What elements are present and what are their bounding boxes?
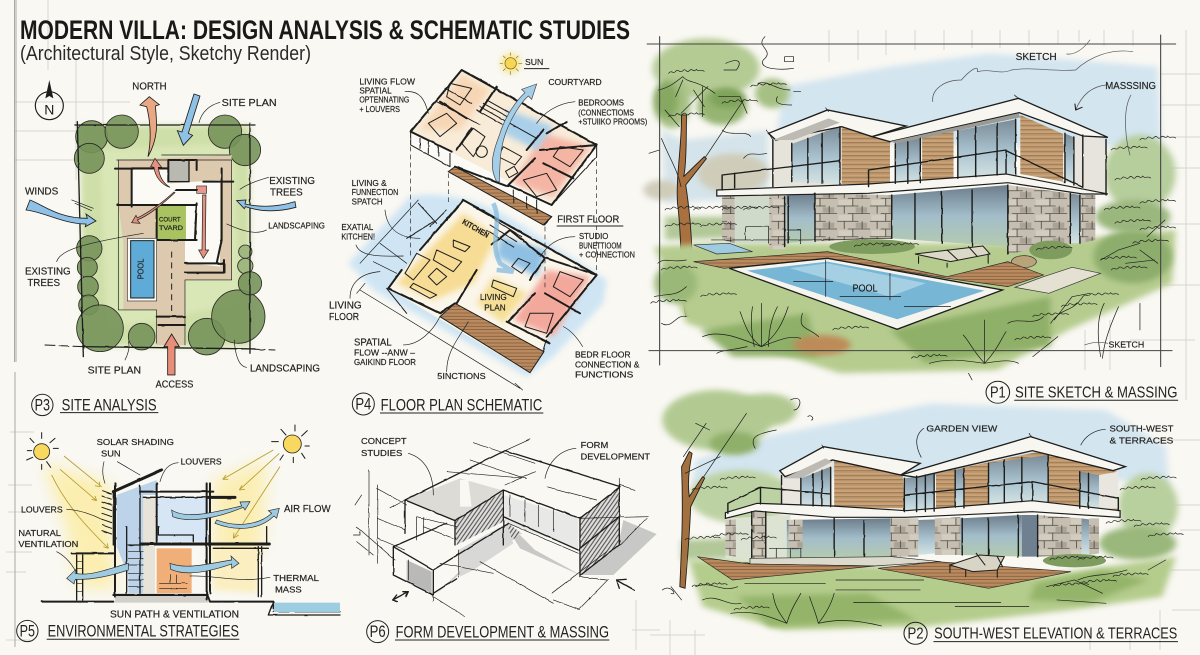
labels — [329, 77, 648, 381]
labels: LOUVERS — [181, 458, 222, 467]
labels: FLOW --ANW – — [354, 349, 416, 358]
labels: SUN PATH & VENTILATION — [110, 609, 239, 620]
heading: P4 — [352, 393, 543, 415]
tree — [649, 37, 801, 317]
labels: (CONNECTIOMS — [578, 108, 634, 117]
lower floor plan: PLAN — [484, 304, 506, 313]
labels: NORTH — [132, 81, 167, 92]
labels: STUDIO — [579, 232, 608, 241]
labels: +STUIIKO PROOMS) — [578, 118, 648, 127]
sky wash — [692, 403, 1169, 487]
arrow: west winds — [26, 200, 96, 227]
heading: P1: P1 — [990, 385, 1006, 401]
heading: P3: P3 — [35, 395, 50, 414]
drawing frame — [647, 35, 1176, 367]
tree — [662, 390, 813, 600]
water wash — [348, 195, 607, 377]
labels: EXISTING — [25, 266, 71, 277]
planting — [651, 69, 1176, 380]
labels: TREES — [27, 278, 60, 289]
labels: FUNNECTION — [352, 188, 399, 197]
cloud and leader lines — [933, 40, 1133, 345]
labels: TREES — [270, 188, 303, 199]
labels: BEDROOMS — [578, 99, 624, 108]
planting and grass strokes — [685, 476, 1183, 626]
labels: SITE PLAN — [88, 365, 141, 376]
villa upper volumes — [780, 437, 1125, 513]
arrow: east winds — [237, 200, 296, 211]
rooms — [115, 480, 208, 603]
heading: P6 — [367, 621, 609, 643]
labels: BUNETTIOOM — [579, 241, 622, 250]
wood deck and side pool — [694, 243, 1101, 293]
labels: FLOOR — [329, 312, 359, 323]
labels: SKETCH — [1016, 52, 1057, 63]
labels — [25, 81, 325, 390]
labels: SPATIAL — [359, 87, 392, 96]
lawn — [654, 230, 1176, 373]
sun: SUN — [525, 57, 543, 67]
heading: P4: FLOOR PLAN SCHEMATIC — [381, 396, 542, 415]
heading: P2 — [904, 622, 1178, 644]
lawn — [689, 557, 1176, 630]
labels: SPATCH — [352, 197, 383, 206]
panel: P4 floor plan schematic — [329, 53, 648, 415]
labels: LANDSCAPING — [268, 221, 325, 230]
lower floor plan: KITCHEN — [461, 217, 491, 240]
subtitle: (Architectural Style, Sketchy Render) — [20, 43, 311, 65]
labels — [926, 425, 1174, 445]
labels: KITCHEN! — [341, 232, 375, 241]
labels: SPATIAL — [354, 338, 392, 349]
labels: STUDIES — [361, 449, 402, 458]
labels — [361, 437, 650, 461]
villa upper volumes — [769, 98, 1108, 194]
labels: LANDSCAPING — [250, 364, 320, 375]
panel: P1 site sketch and massing — [644, 35, 1178, 403]
labels: VENTILATION — [18, 540, 79, 549]
heading: P4: P4 — [355, 395, 371, 414]
heading: P6: P6 — [370, 622, 386, 641]
building footprint and courtyard: TVARD — [159, 225, 183, 232]
panel: P5 environmental strategies — [17, 425, 340, 642]
labels: + LOUVERS — [359, 105, 400, 114]
labels: FUNCTIONS — [575, 370, 633, 379]
labels: FIRST FLOOR — [557, 215, 619, 226]
deck and loungers — [697, 553, 1106, 588]
labels: GAIKIND FLOOR — [354, 358, 416, 367]
labels: SITE PLAN — [222, 98, 277, 109]
labels: MASSSING — [1105, 81, 1156, 92]
heading: P1 — [986, 381, 1178, 403]
labels: SKETCH — [1109, 341, 1144, 350]
labels: + COHNECTION — [579, 251, 635, 260]
labels: SOUTH-WEST — [1110, 425, 1173, 434]
suns — [27, 425, 309, 469]
villa line work — [711, 95, 1106, 254]
labels: CONNECTION & — [575, 361, 640, 370]
villa line work — [720, 433, 1118, 565]
heading: P5: P5 — [20, 621, 35, 640]
background foliage — [644, 135, 1176, 240]
labels: LIVING & — [352, 179, 387, 188]
labels: COURTYARD — [548, 78, 602, 87]
labels: SOLAR SHADING — [97, 438, 174, 447]
labels: FORM — [581, 441, 608, 450]
compass — [35, 80, 63, 120]
leader lines — [917, 428, 1105, 457]
sun — [500, 53, 549, 75]
massing faces — [407, 487, 620, 593]
heading: P3: SITE ANALYSIS — [62, 396, 157, 415]
background foliage — [682, 470, 1178, 560]
air flow arrows — [67, 502, 279, 584]
ground shadow — [405, 478, 657, 595]
labels: LOUVERS — [21, 506, 63, 515]
villa ground floor — [725, 501, 1120, 565]
heading: P6: FORM DEVELOPMENT & MASSING — [396, 622, 609, 641]
labels: CONCEPT — [361, 437, 407, 446]
heading: P5 — [17, 620, 239, 642]
labels: THERMAL — [273, 574, 320, 583]
leader lines — [57, 462, 270, 580]
section lines — [42, 470, 340, 615]
labels: SUN — [101, 450, 121, 459]
arrow: north — [140, 97, 159, 157]
panel: P6 form development — [353, 437, 657, 643]
heading: P5: ENVIRONMENTAL STRATEGIES — [48, 622, 239, 641]
panel: P2 south-west elevation and terraces — [662, 390, 1183, 644]
site plan lawn — [80, 125, 250, 347]
trees — [74, 115, 265, 355]
labels: LIVING FLOW — [359, 77, 415, 86]
labels: NATURAL — [18, 529, 62, 538]
labels: AIR FLOW — [284, 504, 332, 515]
leader lines — [408, 448, 576, 495]
heading: P2: P2 — [907, 626, 924, 643]
labels: DEVELOPMENT — [581, 452, 650, 461]
labels: ACCESS — [156, 379, 193, 390]
villa ground floor — [717, 174, 1108, 254]
projection lines — [411, 147, 597, 290]
sketch lines — [353, 439, 648, 617]
arrow: interior flows — [132, 158, 209, 258]
solar rays — [52, 450, 280, 548]
flow arrow — [492, 84, 537, 182]
arrow: blue wind from north — [177, 94, 200, 145]
pool: POOL — [136, 258, 146, 279]
pool — [729, 258, 1002, 329]
labels: EXATIAL — [341, 223, 374, 232]
leader lines — [350, 91, 583, 372]
upper floor plan — [411, 70, 597, 225]
site boundary — [45, 122, 275, 357]
pool — [127, 238, 157, 301]
title: MODERN VILLA: DESIGN ANALYSIS & SCHEMATIC STUDIES — [20, 15, 630, 45]
labels: BEDR FLOOR — [575, 351, 631, 360]
leader lines — [57, 102, 269, 367]
labels: & TERRACES — [1110, 437, 1174, 445]
compass: N — [44, 101, 54, 117]
patio furniture and lounges — [829, 239, 1072, 268]
sunlight wash — [43, 460, 267, 593]
sky wash — [661, 53, 1161, 203]
labels: WINDS — [25, 186, 58, 197]
water at section edge — [274, 603, 340, 612]
pool: POOL — [852, 284, 878, 295]
labels: GARDEN VIEW — [926, 425, 998, 434]
labels — [1016, 52, 1156, 350]
labels: EXISTING — [269, 176, 315, 187]
lower floor plan — [387, 200, 597, 373]
labels: MASS — [275, 586, 302, 595]
building footprint and courtyard: COURT — [159, 217, 181, 224]
labels: 5INCTIONS — [437, 372, 486, 381]
labels — [18, 438, 332, 620]
panel: P3 site analysis — [25, 80, 325, 416]
arrow: access — [164, 334, 179, 375]
heading: P3 — [32, 394, 158, 416]
building footprint and courtyard — [115, 155, 233, 345]
labels: LIVING — [329, 300, 362, 311]
lower floor plan: LIVING — [480, 293, 507, 302]
labels: OPTENNATING — [359, 96, 409, 105]
